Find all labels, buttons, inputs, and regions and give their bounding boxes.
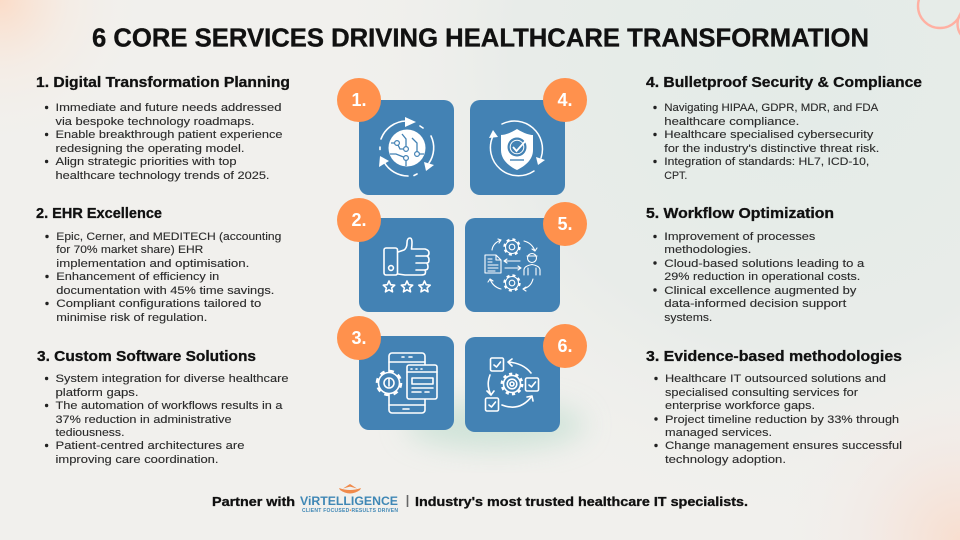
tile 3: custom software [337, 316, 454, 430]
bullet list: service 5: Clinical excellence augmented by [664, 285, 857, 297]
bullet list: service 1: Align strategic priorities with top [56, 156, 236, 168]
bullet list: service 3 [45, 373, 289, 466]
tile 1: digital transformation [337, 78, 454, 195]
bullet list: service 1: redesigning the operating model. [56, 143, 244, 155]
icon: shield with check [489, 121, 545, 176]
bullet list: service 2: Compliant configurations tailored to [56, 298, 261, 310]
bullet list: service 6: managed services. [665, 427, 772, 439]
bullet list: service 5: Cloud-based solutions leading to a [664, 258, 865, 270]
bullet list: service 6: specialised consulting services for [665, 387, 858, 399]
tile 5: workflow [465, 202, 587, 312]
tile 6: evidence based [465, 324, 587, 432]
bullet list: service 4 [653, 102, 879, 182]
bullet list: service 4: Integration of standards: HL7, ICD-10, [664, 156, 869, 168]
panel: service 6 text [646, 348, 902, 466]
bullet list: service 6: Change management ensures successful [665, 440, 902, 452]
bullet list: service 5: 29% reduction in operational costs. [664, 271, 860, 283]
bullet list: service 2: implementation and optimisation. [56, 258, 249, 270]
bullet list: service 4: CPT. [664, 170, 687, 182]
footer: partner line [212, 484, 748, 514]
bullet list: service 2: for 70% market share) EHR [56, 244, 203, 256]
logo: Virtelligence [300, 484, 398, 514]
bullet list: service 1: Immediate and future needs addressed [56, 102, 282, 114]
bullet list: service 4: healthcare compliance. [664, 116, 799, 128]
icon: thumbs up with stars [383, 238, 430, 292]
heading: service 2: 2. EHR Excellence [36, 205, 162, 222]
heading: service 1: 1. Digital Transformation Planning [36, 74, 290, 91]
panel: service 4 text [646, 74, 922, 182]
bullet list: service 5: methodologies. [664, 244, 751, 256]
bullet list: service 3: Patient-centred architectures are [56, 440, 244, 452]
bullet list: service 1 [45, 102, 283, 182]
bullet list: service 2: minimise risk of regulation. [56, 312, 207, 324]
bullet list: service 4: Navigating HIPAA, GDPR, MDR, and FDA [664, 102, 879, 114]
bullet list: service 5: systems. [664, 312, 712, 324]
bullet list: service 2: Enhancement of efficiency in [56, 271, 219, 283]
footer: partner line: Industry's most trusted healthcare IT specialists. [415, 494, 748, 509]
footer: partner line: Partner with [212, 494, 295, 509]
decorative corner circles [918, 0, 960, 42]
bullet list: service 4: for the industry's distinctive threat risk. [664, 143, 879, 155]
bullet list: service 1: healthcare technology trends of 2025. [56, 170, 270, 182]
bullet list: service 5 [653, 231, 865, 324]
bullet list: service 2 [45, 231, 281, 324]
tile 2: EHR [337, 198, 454, 312]
bullet list: service 3: improving care coordination. [56, 454, 218, 466]
bullet list: service 2: Epic, Cerner, and MEDITECH (accounting [56, 231, 281, 243]
bullet list: service 6: Healthcare IT outsourced solutions and [665, 373, 886, 385]
bullet list: service 2: documentation with 45% time savings. [56, 285, 274, 297]
bullet list: service 4: Healthcare specialised cybersecurity [664, 129, 874, 141]
icon: gear with checklist cycle [486, 358, 538, 411]
heading: service 5: 5. Workflow Optimization [646, 205, 834, 222]
bullet list: service 6 [654, 373, 902, 466]
badge: 5: 5. [557, 214, 573, 234]
bullet list: service 3: The automation of workflows results in a [56, 400, 283, 412]
badge: 2: 2. [351, 210, 367, 230]
bullet list: service 3: tediousness. [56, 427, 124, 439]
bullet list: service 3: platform gaps. [56, 387, 138, 399]
icon: circuit globe with arrows [379, 117, 434, 176]
bullet list: service 6: technology adoption. [665, 454, 786, 466]
bullet list: service 5: data-informed decision support [664, 298, 847, 310]
bullet list: service 5: Improvement of processes [664, 231, 816, 243]
tile 4: security [470, 78, 587, 195]
panel: service 5 text [646, 205, 865, 324]
heading: service 4: 4. Bulletproof Security & Compliance [646, 74, 922, 91]
logo: Virtelligence: CLIENT FOCUSED•RESULTS DRIVEN [302, 508, 398, 514]
bullet list: service 3: 37% reduction in administrative [56, 414, 232, 426]
bullet list: service 6: enterprise workforce gaps. [665, 400, 815, 412]
logo: Virtelligence: ViRTELLIGENCE [300, 494, 398, 508]
heading: service 3: 3. Custom Software Solutions [37, 348, 256, 365]
title: 6 CORE SERVICES DRIVING HEALTHCARE TRANSFORMATION [92, 24, 869, 52]
bullet list: service 3: System integration for diverse healthcare [56, 373, 288, 385]
panel: service 1 text [36, 74, 290, 182]
bullet list: service 6: Project timeline reduction by 33% through [665, 414, 899, 426]
badge: 3: 3. [351, 328, 367, 348]
panel: service 2 text [36, 205, 281, 324]
icon: workflow cycle with document, gears and person [485, 239, 540, 291]
bullet list: service 1: via bespoke technology roadmaps. [56, 116, 254, 128]
panel: service 3 text [37, 348, 288, 466]
icon: phone with gear and window [377, 353, 437, 413]
bullet list: service 1: Enable breakthrough patient experience [56, 129, 282, 141]
badge: 1: 1. [351, 90, 367, 110]
heading: service 6: 3. Evidence-based methodologies [646, 348, 902, 365]
badge: 4: 4. [557, 90, 573, 110]
badge: 6: 6. [557, 336, 573, 356]
